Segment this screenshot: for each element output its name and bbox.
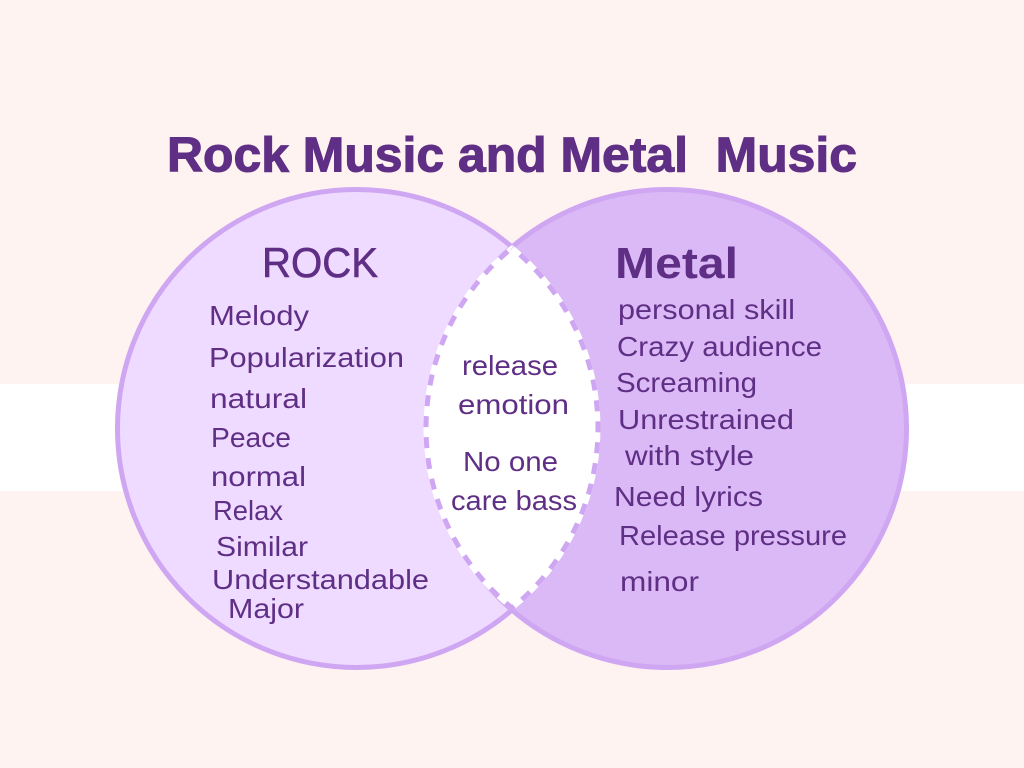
shared item: No one: No one — [463, 446, 558, 477]
rock item: Peace: Peace — [211, 422, 291, 453]
panel: rock list — [209, 239, 429, 624]
panel: shared list — [451, 350, 577, 516]
shared item: care bass: care bass — [451, 485, 577, 516]
rock item: Melody: Melody — [209, 300, 309, 331]
metal item: personal skill: personal skill — [618, 294, 795, 325]
metal item: Unrestrained: Unrestrained — [618, 404, 794, 435]
venn diagram — [118, 190, 906, 668]
metal item: Release pressure: Release pressure — [619, 520, 847, 551]
heading: Metal: Metal — [615, 239, 738, 288]
rock item: Understandable: Understandable — [212, 564, 429, 595]
metal item: with style: with style — [624, 440, 754, 471]
title: Rock Music and Metal Music — [167, 128, 857, 182]
shared item: emotion: emotion — [458, 389, 569, 420]
metal item: Screaming: Screaming — [616, 367, 757, 398]
overlap: shared region — [426, 248, 598, 608]
rock item: Similar: Similar — [216, 531, 308, 562]
rock item: Major: Major — [228, 593, 304, 624]
circle: metal — [428, 190, 906, 668]
circle: rock — [118, 190, 596, 668]
metal item: minor: minor — [620, 566, 699, 597]
rock item: normal: normal — [211, 461, 306, 492]
heading: ROCK: ROCK — [262, 239, 378, 286]
shared item: release: release — [462, 350, 558, 381]
rock item: Relax: Relax — [213, 495, 283, 526]
rock item: natural: natural — [210, 383, 307, 414]
rock item: Popularization: Popularization — [209, 342, 404, 373]
metal item: Crazy audience: Crazy audience — [617, 331, 822, 362]
panel: metal list — [614, 239, 847, 597]
metal item: Need lyrics: Need lyrics — [614, 481, 763, 512]
